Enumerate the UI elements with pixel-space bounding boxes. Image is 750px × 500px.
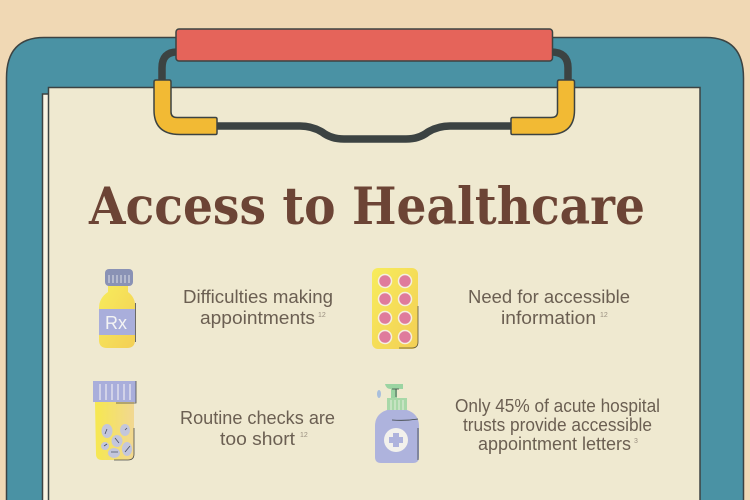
text: need for accessible information: information bbox=[501, 308, 596, 328]
back sheet of paper bbox=[42, 94, 62, 500]
icon: pump bottle bbox=[375, 384, 419, 463]
text: need for accessible information bbox=[468, 287, 630, 328]
text: only 45% of acute hospital trusts: appointment letters bbox=[478, 434, 631, 454]
paper bbox=[48, 88, 700, 500]
text: need for accessible information: Need for accessible bbox=[468, 287, 630, 307]
text: only 45% of acute hospital trusts: 3 bbox=[634, 438, 638, 445]
text: difficulties making appointments bbox=[183, 287, 333, 328]
text: only 45% of acute hospital trusts: Only 45% of acute hospital bbox=[455, 396, 660, 416]
text: difficulties making appointments: appointments bbox=[200, 308, 315, 328]
red clip bar bbox=[176, 29, 552, 61]
text: routine checks are too short bbox=[180, 408, 335, 449]
text: difficulties making appointments: Difficulties making bbox=[183, 287, 333, 307]
clip wire bbox=[162, 52, 568, 139]
icon: pill jar bbox=[93, 381, 136, 460]
text: difficulties making appointments: 12 bbox=[318, 312, 326, 319]
icon: prescription bottle: Rx bbox=[105, 313, 127, 333]
text: only 45% of acute hospital trusts: trusts provide accessible bbox=[463, 415, 652, 435]
text: routine checks are too short: too short bbox=[220, 429, 295, 449]
icon: prescription bottle bbox=[99, 269, 136, 348]
text: need for accessible information: 12 bbox=[600, 312, 608, 319]
icon: blister pack bbox=[372, 268, 418, 349]
left yellow clip arm bbox=[154, 80, 217, 134]
right yellow clip arm bbox=[511, 80, 574, 134]
text: routine checks are too short: Routine checks are bbox=[180, 408, 335, 428]
text: routine checks are too short: 12 bbox=[300, 432, 308, 439]
text: only 45% of acute hospital trusts bbox=[455, 396, 660, 454]
title: Access to Healthcare bbox=[88, 177, 645, 237]
